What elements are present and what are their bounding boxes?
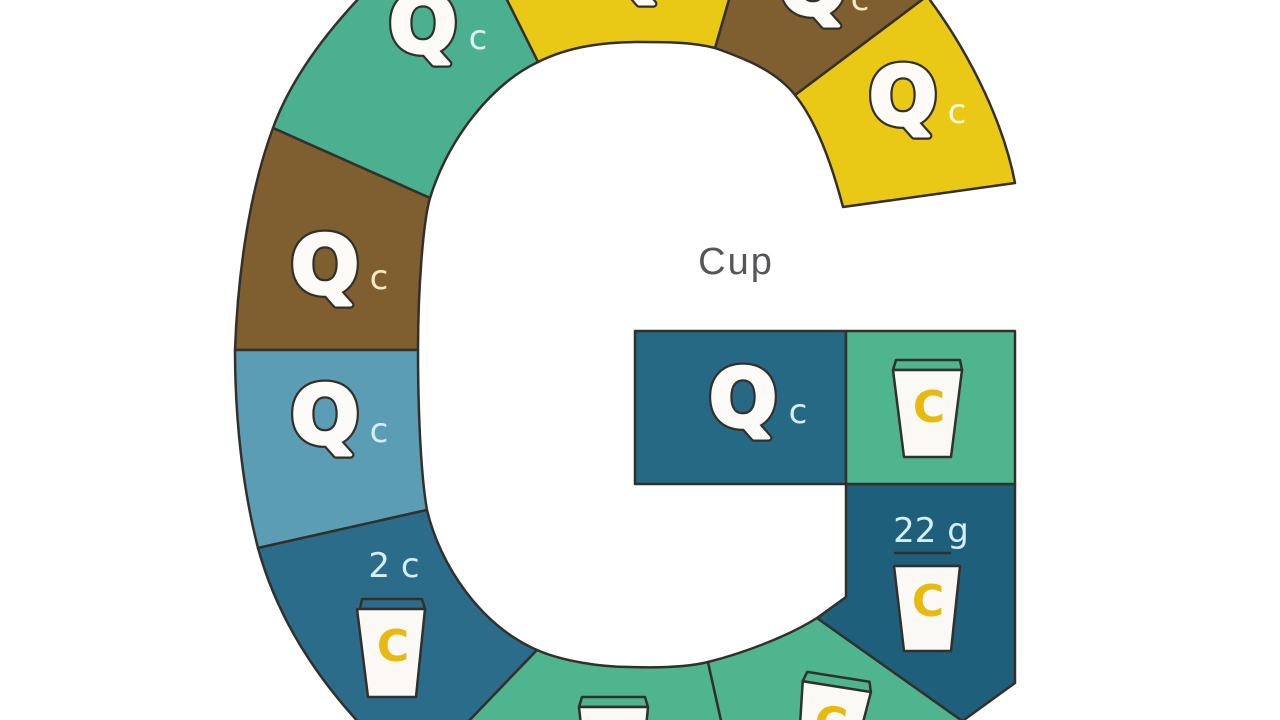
icon: cup in dark blue segment — [357, 599, 425, 697]
segment: green crossbar end — [846, 331, 1015, 484]
segment: dark blue bottom left — [258, 510, 537, 720]
icon: cup in dark teal segment: C — [912, 576, 944, 627]
segment: brown left — [235, 128, 430, 350]
icon group: Q in yellow right segment: Q — [869, 50, 937, 143]
icon: cup in green bottom segment — [579, 697, 648, 720]
icon group: Q in brown left segment — [291, 219, 388, 312]
segment: green bottom right — [708, 618, 968, 720]
icon: cup in dark blue segment: C — [377, 621, 409, 672]
icon group: Q in light blue segment: c — [370, 411, 388, 451]
icon group: Q in light blue segment: Q — [291, 369, 359, 462]
segment: dark blue crossbar — [635, 331, 846, 484]
icon group: Q in light blue segment — [291, 369, 388, 462]
icon group: Q in brown left segment: Q — [291, 219, 359, 312]
icon group: Q in yellow right segment — [869, 50, 966, 143]
label: 22 g: 22 g — [893, 511, 969, 551]
icon: cup in dark teal segment — [894, 553, 960, 651]
segment: yellow top — [505, 0, 730, 62]
icon: tilted cup in green bottom right segment — [788, 671, 872, 720]
icon group: Q in light blue segment: Q — [291, 369, 359, 462]
icon group: Q in brown left segment: c — [370, 258, 388, 298]
segment: teal top left — [273, 0, 538, 198]
icon group: Q in brown left segment: Q — [291, 219, 359, 312]
label: Cup: Cup — [698, 241, 774, 283]
icon group: Q in yellow right segment: c — [948, 92, 966, 132]
segment: brown top right — [715, 0, 927, 95]
icon group: Q in teal segment — [389, 0, 487, 71]
icon: cup in green crossbar: C — [913, 382, 945, 433]
icon group: Q in crossbar — [709, 352, 807, 445]
icon group: Q in crossbar: c — [789, 392, 807, 432]
icon group: Q in teal segment: c — [469, 18, 487, 58]
segment: yellow right end — [795, 0, 1015, 207]
icon group: Q in crossbar: Q — [709, 352, 777, 445]
segment: dark teal right — [817, 484, 1015, 720]
segment: light blue left — [235, 350, 427, 548]
icon group: Q in crossbar: Q — [709, 352, 777, 445]
label: 2 c: 2 c — [368, 546, 420, 586]
icon group: Q in yellow right segment: Q — [869, 50, 937, 143]
icon: cup in green crossbar — [893, 360, 962, 457]
segment: green bottom — [465, 650, 722, 720]
